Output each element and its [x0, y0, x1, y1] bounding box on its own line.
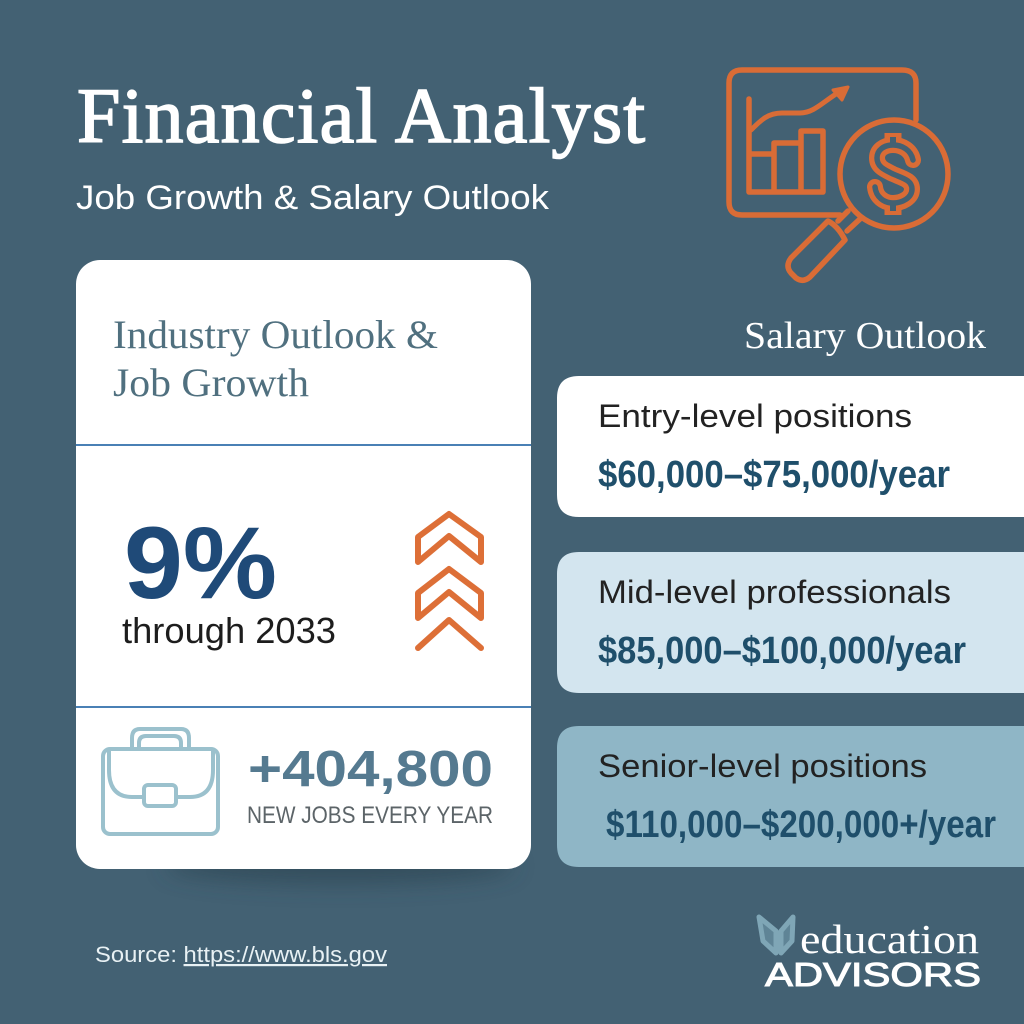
panel: senior level — [557, 726, 1024, 867]
panel heading: Job Growth — [113, 360, 309, 405]
statistic caption: through 2033 — [122, 610, 336, 651]
panel: mid level: Mid-level professionals — [598, 574, 951, 610]
panel: entry level — [557, 376, 1024, 517]
logo — [759, 916, 981, 993]
icon: up chevrons — [418, 514, 481, 648]
icon: chart and magnifying glass — [729, 70, 948, 280]
panel heading: Industry Outlook & — [113, 312, 438, 357]
panel: industry outlook — [76, 260, 531, 869]
title: Financial Analyst — [77, 72, 645, 159]
statistic: new jobs: +404,800 — [248, 740, 493, 797]
panel: mid level: $85,000–$100,000/year — [598, 630, 966, 672]
heading: salary outlook: Salary Outlook — [744, 315, 986, 357]
card shadow — [165, 848, 515, 884]
subtitle: Job Growth & Salary Outlook — [76, 179, 550, 217]
panel: mid level — [557, 552, 1024, 693]
icon: briefcase — [103, 729, 218, 834]
statistic caption: new jobs: NEW JOBS EVERY YEAR — [247, 802, 493, 829]
logo: book icon — [759, 917, 793, 953]
panel: entry level: Entry-level positions — [598, 398, 912, 434]
panel: entry level: $60,000–$75,000/year — [598, 454, 950, 496]
logo: education — [800, 916, 979, 962]
panel: senior level: Senior-level positions — [598, 748, 927, 784]
source note: Source: https://www.bls.gov — [95, 942, 387, 967]
logo: ADVISORS — [765, 956, 981, 993]
statistic: 9%: 9% — [124, 506, 277, 620]
